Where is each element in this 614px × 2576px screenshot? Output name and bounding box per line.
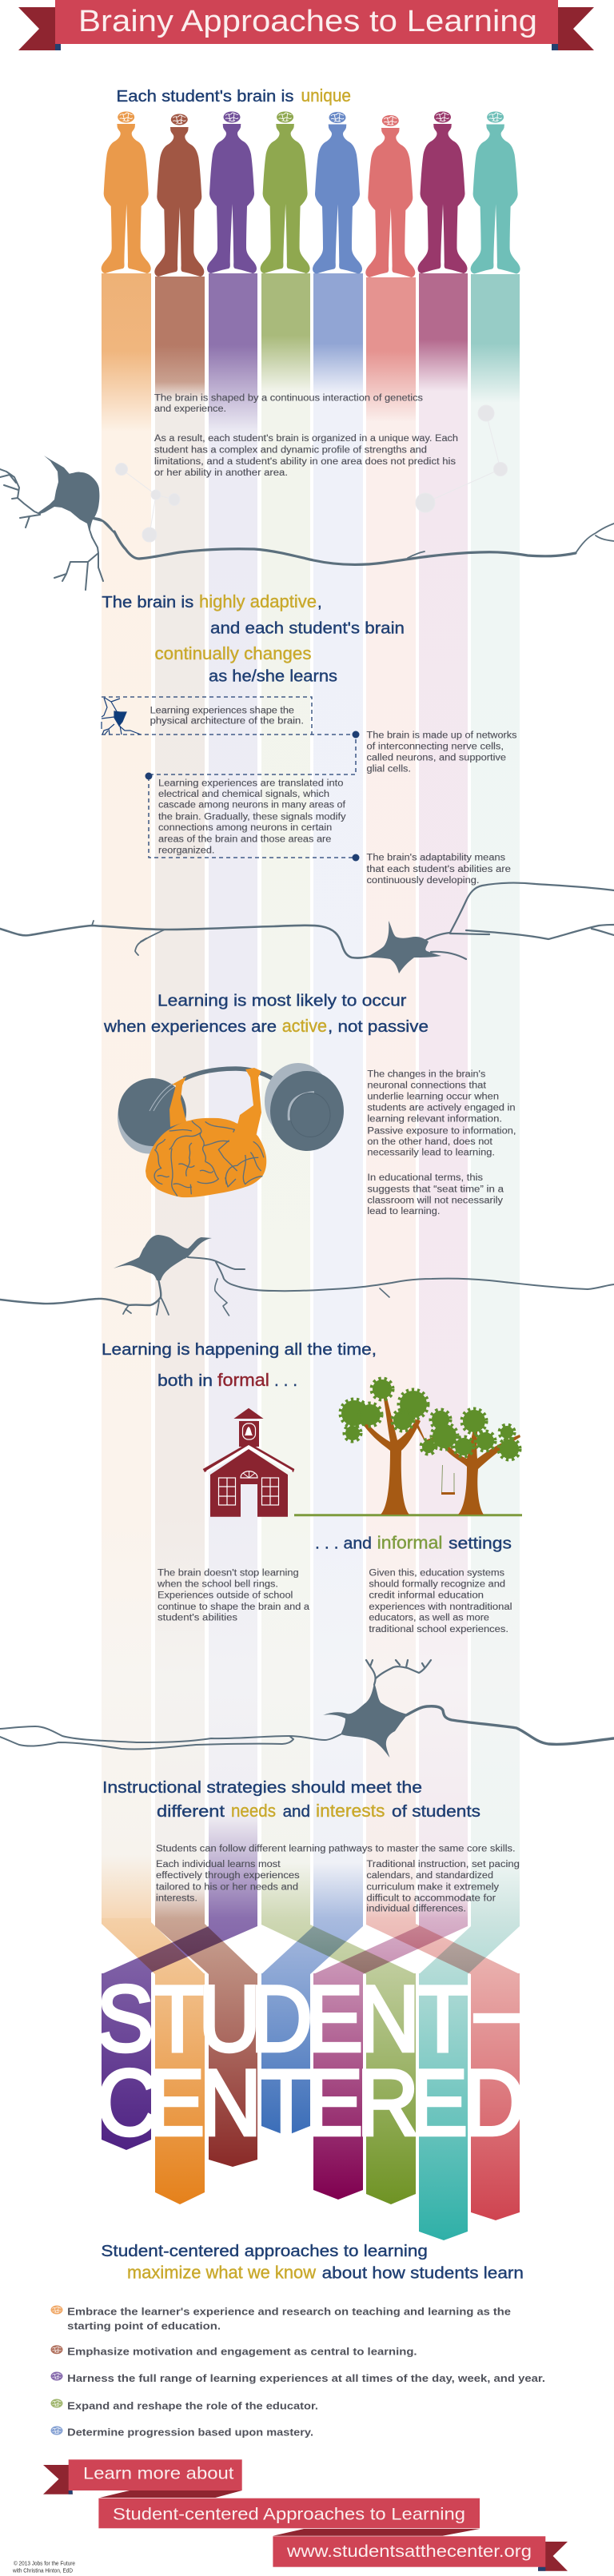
text block: different pathways: calendars, and standardized [366,1871,493,1881]
heading: instructional strategies: different [157,1802,225,1821]
text block: networks of nerve cells: of interconnecting nerve cells, [366,742,504,751]
footer credit: with Christina Hinton, EdD [12,2567,73,2574]
heading: learning happening all the time, formal [102,1340,377,1390]
list: student-centered principles [51,2305,545,2439]
text block: active engagement: students are actively engaged in [367,1104,516,1113]
heading: learning happening all the time, formal: formal [217,1370,269,1390]
icon: small navy neuron [102,698,141,735]
heading: instructional strategies [102,1778,480,1821]
heading: brain is highly adaptive [102,591,405,686]
heading: learning most likely active: , not passive [328,1017,429,1036]
text block: active engagement: In educational terms, this [367,1173,483,1183]
call to action ribbons [43,2459,568,2571]
text block: networks of nerve cells: glial cells. [366,765,411,774]
heading: brain is highly adaptive: The brain is [102,593,193,611]
text block: brain shaped by genetics and experience [154,394,458,478]
heading: learning most likely active [103,991,429,1036]
text block: learning experiences shape: physical architecture of the brain. [150,717,304,727]
text block: different pathways: Students can follow different learning pathways to master the same core skills. [156,1845,516,1854]
heading: instructional strategies: and [283,1802,310,1821]
title banner [18,0,594,50]
text block: electrical and chemical signals: connections among neurons in certain [158,823,332,833]
text block: active engagement: suggests that “seat time” in a [367,1185,504,1195]
heading: learning happening all the time, formal: both in [157,1372,213,1390]
heading: instructional strategies: Instructional strategies should meet the [102,1778,422,1797]
text block: active engagement [367,1070,516,1216]
text block: networks of nerve cells: called neurons, and supportive [366,754,506,763]
text block: education systems should credit informal: should formally recognize and [369,1580,505,1590]
text block: active engagement: necessarily lead to learning. [367,1149,495,1158]
neuron 3 [0,1235,614,1316]
bullet: motivation: Emphasize motivation and engagement as central to learning. [67,2346,417,2358]
text block: active engagement: underlie learning occur when [367,1092,499,1101]
text block: brain shaped by genetics and experience: student has a complex and dynamic profile of strengths and [154,446,427,456]
illustration: brain lifting barbell [118,1063,344,1197]
text block: adaptability: that each student's abilities are [366,865,511,874]
text block: brain doesn't stop learning [157,1569,310,1623]
heading: learning happening all the time, formal: Learning is happening all the time, [102,1340,377,1359]
heading: brain is highly adaptive: continually changes [155,643,312,663]
text block: different pathways: Traditional instruction, set pacing [366,1860,520,1869]
title banner: Brainy Approaches to Learning [78,5,537,38]
text block: brain shaped by genetics and experience: or her ability in another area. [154,468,288,478]
text block: education systems should credit informal: experiences with nontraditional [369,1603,512,1612]
text block: learning experiences shape [150,706,304,727]
title art: STUDENT-CENTERED: CENTERED [97,2050,525,2155]
neuron 1 [0,456,614,590]
heading: learning most likely active: when experiences are [103,1017,277,1036]
text block: adaptability [366,854,511,886]
bullet: full range: Harness the full range of learning experiences at all times of the day, week, and year. [67,2372,545,2384]
text block: adaptability: continuously developing. [366,876,480,886]
heading: student-centered approaches: Student-centered approaches to learning [101,2242,428,2260]
bullet: embrace: starting point of education. [67,2319,221,2331]
bullet: educator: Expand and reshape the role of the educator. [67,2399,318,2411]
text block: adaptability: The brain's adaptability means [366,854,505,863]
footer credit [12,2559,75,2574]
heading: brain is highly adaptive: highly adaptive [199,591,317,611]
heading: instructional strategies: interests [316,1801,385,1821]
text block: electrical and chemical signals: electrical and chemical signals, which [158,790,329,799]
heading: brain is highly adaptive: , [317,593,322,611]
text block: brain doesn't stop learning: continue to shape the brain and a [157,1603,310,1612]
text block: brain shaped by genetics and experience: limitations, and a student's ability in one area does not predict his [154,457,456,467]
text block: active engagement: learning relevant information. [367,1115,502,1125]
text block: active engagement: on the other hand, does not [367,1137,493,1147]
text block: brain doesn't stop learning: Experiences outside of school [157,1591,293,1600]
ribbon: website [273,2536,568,2571]
icon: trees with swing [294,1380,522,1516]
heading: learning happening all the time, formal: . . . [274,1372,297,1390]
figures: eight students with brains [102,112,520,277]
text block: networks of nerve cells [366,731,517,774]
neuron 2 [0,883,614,973]
bullet: mastery: Determine progression based upon mastery. [67,2427,313,2439]
text block: different pathways [156,1845,520,1914]
heading: learning most likely active: Learning is most likely to occur [157,991,407,1009]
panel: colored column strips [102,273,520,1918]
heading: each brain unique: unique [301,86,351,106]
heading: and informal settings: informal [377,1533,443,1553]
text block: active engagement: classroom will not necessarily [367,1196,503,1205]
ribbon: approaches [98,2498,480,2536]
text block: different pathways: individual differences. [366,1905,466,1914]
text block: education systems should credit informal: traditional school experiences. [369,1625,508,1634]
text block: active engagement: The changes in the brain's [367,1070,486,1080]
text block: electrical and chemical signals [158,778,346,855]
text block: brain doesn't stop learning: The brain doesn't stop learning [157,1569,299,1579]
heading: each brain unique: Each student's brain is [117,87,294,106]
text block: brain shaped by genetics and experience: As a result, each student's brain is organized in a unique way. Each [154,434,458,444]
heading: student-centered approaches [101,2242,524,2283]
chart: braided student strands [102,1918,520,2240]
text block: different pathways: difficult to accommodate for [366,1893,496,1903]
text block: active engagement: lead to learning. [367,1207,440,1216]
text block: brain shaped by genetics and experience: and experience. [154,404,226,414]
heading: instructional strategies: needs [231,1801,276,1821]
heading: and informal settings: settings [449,1535,512,1553]
text block: brain doesn't stop learning: student's abilities [157,1614,237,1623]
text block: different pathways: curriculum make it extremely [366,1882,499,1892]
text block: different pathways: effectively through experiences [156,1871,300,1881]
heading: each brain unique [117,86,351,106]
footer credit: © 2013 Jobs for the Future [14,2559,75,2566]
bullet: embrace [51,2305,511,2331]
ribbon: approaches: Student-centered Approaches to Learning [113,2505,465,2523]
text block: electrical and chemical signals: areas of the brain and those areas are [158,835,331,845]
text block: education systems should credit informal: credit informal education [369,1591,484,1600]
heading: brain is highly adaptive: as he/she learns [209,667,337,686]
ribbon: learn more [43,2459,242,2498]
diagram: dashed connector path [102,697,360,862]
title art: STUDENT-CENTERED: STUDENT– [97,1957,523,2071]
ribbon: learn more: Learn more about [83,2465,234,2483]
text block: networks of nerve cells: The brain is made up of networks [366,731,517,740]
text block: different pathways: interests. [156,1893,197,1903]
heading: student-centered approaches: about how students learn [322,2264,524,2283]
heading: and informal settings: . . . and [315,1535,372,1553]
title art: STUDENT-CENTERED [97,1957,525,2155]
text block: different pathways: tailored to his or her needs and [156,1882,298,1892]
text block: electrical and chemical signals: Learning experiences are translated into [158,778,344,788]
neuron 4 [0,1660,614,1758]
text block: brain shaped by genetics and experience: The brain is shaped by a continuous interaction of genetics [154,394,423,404]
heading: student-centered approaches: maximize what we know [127,2263,316,2283]
text block: electrical and chemical signals: reorganized. [158,846,214,855]
text block: education systems should credit informal [369,1569,512,1634]
text block: active engagement: Passive exposure to information, [367,1126,516,1136]
heading: learning most likely active: active [282,1016,327,1036]
text block: different pathways: Each individual learns most [156,1860,281,1869]
text block: learning experiences shape: Learning experiences shape the [150,706,294,715]
decorative faint network [115,405,507,542]
heading: and informal settings [315,1533,512,1553]
text block: brain doesn't stop learning: when the school bell rings. [157,1580,278,1590]
bullet: embrace: Embrace the learner's experience and research on teaching and learning as the [67,2306,511,2318]
text block: active engagement: neuronal connections that [367,1081,487,1090]
text block: electrical and chemical signals: the brain. Gradually, these signals modify [158,812,346,822]
heading: instructional strategies: of students [392,1802,480,1821]
text block: education systems should credit informal: Given this, education systems [369,1569,504,1579]
text block: education systems should credit informal: educators, as well as more [369,1614,489,1623]
heading: brain is highly adaptive: and each student's brain [210,619,405,638]
icon: red schoolhouse [203,1408,294,1517]
ribbon: website: www.studentsatthecenter.org [286,2542,532,2561]
text block: electrical and chemical signals: cascade among neurons in many areas of [158,801,346,810]
